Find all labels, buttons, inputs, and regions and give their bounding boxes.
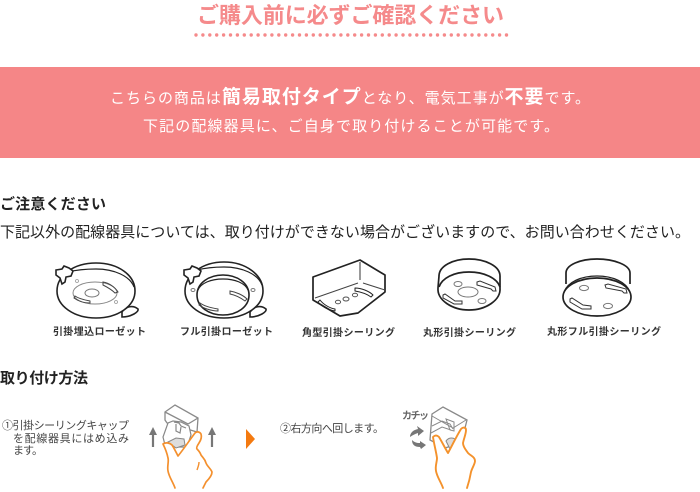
icon: recessed hanging rosette <box>56 263 138 318</box>
icon: round full hanging ceiling <box>563 259 631 316</box>
icon: full hanging rosette <box>184 262 266 318</box>
panel: notice banner <box>0 67 700 158</box>
illustration: step 2 hand and cap <box>402 407 475 488</box>
label: square hanging ceiling: 角型引掛シーリング <box>302 326 395 339</box>
step 1 text: を配線器具にはめ込み <box>13 432 129 445</box>
icon: square hanging ceiling <box>313 260 385 316</box>
click label: カチッ <box>402 410 429 422</box>
up arrows <box>153 432 212 447</box>
label: round hanging ceiling: 丸形引掛シーリング <box>423 326 516 339</box>
rotate arrows <box>410 426 424 437</box>
heading: caution: ご注意ください <box>0 195 106 213</box>
step 1 text: ます。 <box>13 444 43 457</box>
label: round full hanging ceiling: 丸形フル引掛シーリング <box>547 325 661 338</box>
step 1 text: ①引掛シーリングキャップ <box>2 418 129 432</box>
caution text: 下記以外の配線器具については、取り付けができない場合がございますので、お問い合わせください。 <box>0 223 690 241</box>
hand <box>163 432 212 488</box>
arrow: next step <box>246 429 255 449</box>
heading: installation method: 取り付け方法 <box>0 369 88 387</box>
notice line 2: 下記の配線器具に、ご自身で取り付けることが可能です。 <box>143 118 559 135</box>
cap <box>430 407 467 448</box>
label: recessed hanging rosette: 引掛埋込ローゼット <box>53 325 146 338</box>
icon: round hanging ceiling <box>438 259 500 310</box>
cap <box>165 405 198 432</box>
step 1 text <box>2 418 129 457</box>
illustration: step 1 hand and cap <box>149 405 216 488</box>
label: full hanging rosette: フル引掛ローゼット <box>180 325 273 338</box>
title: ご購入前に必ずご確認ください <box>197 3 504 28</box>
hand <box>433 428 475 488</box>
step 2 text: ②右方向へ回します。 <box>280 421 384 435</box>
notice line 1: こちらの商品は簡易取付タイプとなり、電気工事が不要です。 <box>110 85 590 108</box>
